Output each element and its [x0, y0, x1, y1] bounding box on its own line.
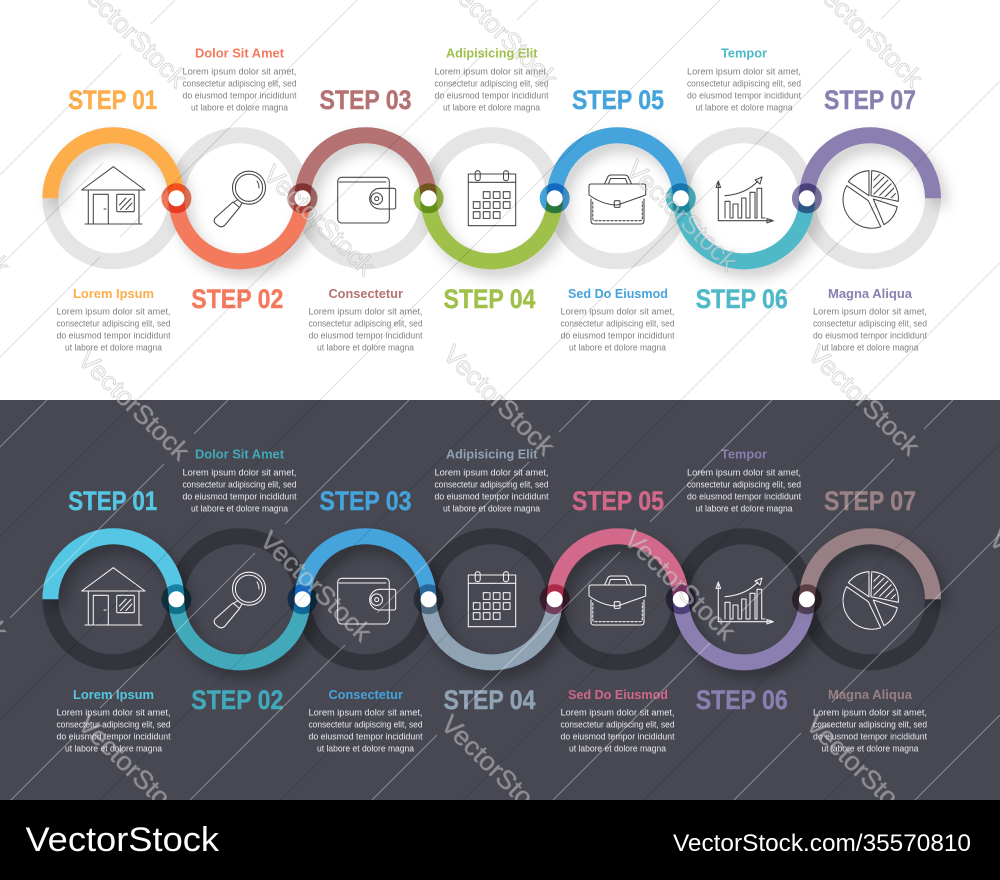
body text 2: consectetur adipiscing elit, sed: [182, 78, 296, 88]
watermarks: VectorStock: [802, 339, 927, 462]
icon: magnifier white: [214, 572, 266, 628]
junction: 05 to 06: [666, 183, 696, 213]
dark body text 5: Lorem ipsum dolor sit amet,: [560, 708, 674, 718]
arc: step 07: [807, 135, 933, 198]
body text 4: consectetur adipiscing elit, sed: [434, 78, 548, 88]
body text 6: Lorem ipsum dolor sit amet,: [687, 66, 801, 76]
watermarks: VectorStock: [257, 159, 382, 282]
body text 3: [308, 306, 423, 352]
panel: light timeline: [50, 46, 933, 352]
arc: dark step 01: [50, 536, 176, 599]
heading: dark Consectetur: Consectetur: [328, 687, 403, 702]
heading: Lorem Ipsum: Lorem Ipsum: [73, 286, 154, 301]
dark body text 2: do eiusmod tempor incididunt: [182, 492, 297, 502]
dark body text 3: ut labore et dolore magna: [317, 744, 414, 754]
watermarks: VectorStock: [437, 339, 562, 462]
dark body text 4: ut labore et dolore magna: [443, 504, 540, 514]
arc: dark step 06: [681, 599, 807, 662]
title: dark step 07: STEP 07: [824, 486, 916, 516]
body text 1: consectetur adipiscing elit, sed: [56, 318, 170, 328]
icon: magnifier: [214, 171, 266, 227]
body text 7: [813, 306, 927, 352]
title: step 02: STEP 02: [191, 284, 283, 314]
icon: growth chart white: [716, 578, 773, 624]
dark body text 7: do eiusmod tempor incididunt: [813, 732, 927, 742]
dark body text 5: [560, 708, 675, 754]
icon: briefcase: [589, 175, 646, 224]
dark body text 3: Lorem ipsum dolor sit amet,: [308, 708, 422, 718]
dark body text 5: do eiusmod tempor incididunt: [560, 732, 675, 742]
dark body text 2: consectetur adipiscing elit, sed: [182, 480, 296, 490]
junction: dark 06 to 07: [792, 584, 822, 614]
junction: 01 to 02: [161, 183, 191, 213]
heading: Adipisicing Elit: Adipisicing Elit: [446, 46, 538, 60]
body text 2: [182, 66, 297, 112]
dark body text 6: do eiusmod tempor incididunt: [687, 492, 801, 502]
dark body text 7: Lorem ipsum dolor sit amet,: [813, 708, 927, 718]
watermarks: VectorStock: [800, 709, 925, 832]
heading: dark Magna Aliqua: Magna Aliqua: [828, 687, 913, 702]
dark body text 3: consectetur adipiscing elit, sed: [308, 720, 422, 730]
body text 6: consectetur adipiscing elit, sed: [687, 78, 801, 88]
icon: wallet: [338, 177, 396, 223]
junction: 06 to 07: [792, 183, 822, 213]
icon: house white: [82, 568, 145, 625]
dark body text 3: [308, 708, 423, 754]
dark body text 7: [813, 708, 927, 754]
heading: dark Dolor Sit Amet: Dolor Sit Amet: [195, 446, 285, 462]
body text 1: Lorem ipsum dolor sit amet,: [56, 306, 170, 316]
icon: calendar: [468, 171, 516, 226]
icon: wallet white: [338, 578, 396, 624]
icon: growth chart: [716, 177, 773, 223]
arc: dark step 04: [429, 599, 555, 662]
title: dark step 03: STEP 03: [320, 486, 412, 516]
junction: 03 to 04: [414, 183, 444, 213]
body text 5: Lorem ipsum dolor sit amet,: [560, 306, 674, 316]
dark body text 4: Lorem ipsum dolor sit amet,: [434, 468, 548, 478]
dark body text 6: [687, 468, 801, 514]
body text 2: do eiusmod tempor incididunt: [182, 90, 297, 100]
title: dark step 05: STEP 05: [572, 486, 664, 516]
heading: Sed Do Eiusmod: Sed Do Eiusmod: [568, 286, 668, 301]
body text 5: do eiusmod tempor incididunt: [560, 330, 675, 340]
junction: 02 to 03: [288, 183, 318, 213]
icon: house: [82, 167, 145, 224]
dark body text 6: ut labore et dolore magna: [696, 504, 792, 514]
body text 5: ut labore et dolore magna: [569, 342, 666, 352]
watermarks: VectorStock: [72, 344, 197, 467]
junction: 04 to 05: [540, 183, 570, 213]
watermarks: VectorStock: [72, 709, 197, 832]
heading: dark Tempor: Tempor: [721, 446, 767, 462]
dark body text 1: ut labore et dolore magna: [65, 744, 162, 754]
dark body text 3: do eiusmod tempor incididunt: [308, 732, 423, 742]
dark body text 7: ut labore et dolore magna: [822, 744, 918, 754]
icon: calendar white: [468, 572, 516, 627]
body text 7: ut labore et dolore magna: [822, 342, 918, 352]
body text 2: ut labore et dolore magna: [191, 102, 288, 112]
body text 3: consectetur adipiscing elit, sed: [308, 318, 422, 328]
dark body text 2: ut labore et dolore magna: [191, 504, 288, 514]
body text 1: ut labore et dolore magna: [65, 342, 162, 352]
icon: pie chart: [843, 169, 899, 228]
title: dark step 04: STEP 04: [444, 685, 536, 715]
body text 4: do eiusmod tempor incididunt: [434, 90, 549, 100]
heading: Consectetur: Consectetur: [328, 286, 403, 301]
arc: step 06: [681, 198, 807, 261]
junction: dark 01 to 02: [161, 584, 191, 614]
watermarks: VectorStock: [254, 525, 379, 648]
dark body text 1: consectetur adipiscing elit, sed: [56, 720, 170, 730]
body text 6: [687, 66, 801, 112]
junction: dark 04 to 05: [540, 584, 570, 614]
watermarks: VectorStock: [620, 154, 745, 277]
heading: dark Sed Do Eiusmod: Sed Do Eiusmod: [568, 687, 668, 702]
watermarks: VectorStock: [435, 709, 560, 832]
heading: dark Adipisicing Elit: Adipisicing Elit: [446, 446, 538, 462]
icon: pie chart white: [843, 570, 899, 629]
icon: briefcase white: [589, 576, 646, 625]
heading: dark Lorem Ipsum: Lorem Ipsum: [73, 687, 154, 702]
junction: dark 05 to 06: [666, 584, 696, 614]
heading: Magna Aliqua: Magna Aliqua: [828, 286, 913, 301]
body text 7: do eiusmod tempor incididunt: [813, 330, 927, 340]
title: step 01: STEP 01: [68, 85, 157, 115]
panel: dark timeline: [50, 446, 933, 754]
junction: dark 02 to 03: [288, 584, 318, 614]
body text 6: ut labore et dolore magna: [696, 102, 792, 112]
footer band: [0, 800, 1000, 880]
body text 4: ut labore et dolore magna: [443, 102, 540, 112]
title: step 04: STEP 04: [444, 284, 536, 314]
dark body text 1: Lorem ipsum dolor sit amet,: [56, 708, 170, 718]
dark rings: [50, 536, 933, 662]
title: step 05: STEP 05: [572, 85, 664, 115]
dark body text 2: [182, 468, 297, 514]
body text 1: [56, 306, 171, 352]
heading: Tempor: Tempor: [721, 46, 767, 60]
body text 4: [434, 66, 549, 112]
heading: Dolor Sit Amet: Dolor Sit Amet: [195, 46, 285, 60]
dark body text 1: do eiusmod tempor incididunt: [56, 732, 171, 742]
body text 2: Lorem ipsum dolor sit amet,: [182, 66, 296, 76]
body text 1: do eiusmod tempor incididunt: [56, 330, 171, 340]
arc: dark step 07: [807, 536, 933, 599]
dark panel background: [0, 400, 1000, 800]
body text 6: do eiusmod tempor incididunt: [687, 90, 801, 100]
title: step 06: STEP 06: [696, 284, 788, 314]
dark body text 4: [434, 468, 549, 514]
dark body text 6: consectetur adipiscing elit, sed: [687, 480, 801, 490]
junction white dots: [168, 190, 815, 206]
body text 7: consectetur adipiscing elit, sed: [813, 318, 927, 328]
grey rings: [50, 135, 933, 261]
arc: dark step 03: [302, 536, 429, 599]
footer logo text: VectorStock: [26, 821, 220, 859]
title: dark step 02: STEP 02: [191, 685, 283, 715]
junction white dots dark: [168, 591, 815, 607]
title: dark step 06: STEP 06: [696, 685, 788, 715]
title: step 07: STEP 07: [824, 85, 916, 115]
dark body text 1: [56, 708, 171, 754]
dark body text 4: do eiusmod tempor incididunt: [434, 492, 549, 502]
title: step 03: STEP 03: [320, 85, 412, 115]
body text 5: [560, 306, 675, 352]
body text 3: Lorem ipsum dolor sit amet,: [308, 306, 422, 316]
arc: step 02: [176, 198, 302, 261]
dark body text 2: Lorem ipsum dolor sit amet,: [182, 468, 296, 478]
dark body text 4: consectetur adipiscing elit, sed: [434, 480, 548, 490]
white panel background: [0, 0, 1000, 400]
arc: step 01: [50, 135, 176, 198]
watermarks: VectorStock: [618, 524, 743, 647]
footer image id: VectorStock.com/35570810: [673, 830, 971, 857]
dark body text 6: Lorem ipsum dolor sit amet,: [687, 468, 801, 478]
dark body text 7: consectetur adipiscing elit, sed: [813, 720, 927, 730]
body text 4: Lorem ipsum dolor sit amet,: [434, 66, 548, 76]
body text 3: do eiusmod tempor incididunt: [308, 330, 423, 340]
arc: step 04: [429, 198, 555, 261]
arc: dark step 05: [555, 536, 681, 599]
arc: step 03: [302, 135, 429, 198]
dark body text 5: consectetur adipiscing elit, sed: [560, 720, 674, 730]
body text 7: Lorem ipsum dolor sit amet,: [813, 306, 927, 316]
arc: step 05: [555, 135, 681, 198]
dark body text 5: ut labore et dolore magna: [569, 744, 666, 754]
title: dark step 01: STEP 01: [68, 486, 157, 516]
body text 5: consectetur adipiscing elit, sed: [560, 318, 674, 328]
arc: dark step 02: [176, 599, 302, 662]
junction: dark 03 to 04: [414, 584, 444, 614]
body text 3: ut labore et dolore magna: [317, 342, 414, 352]
